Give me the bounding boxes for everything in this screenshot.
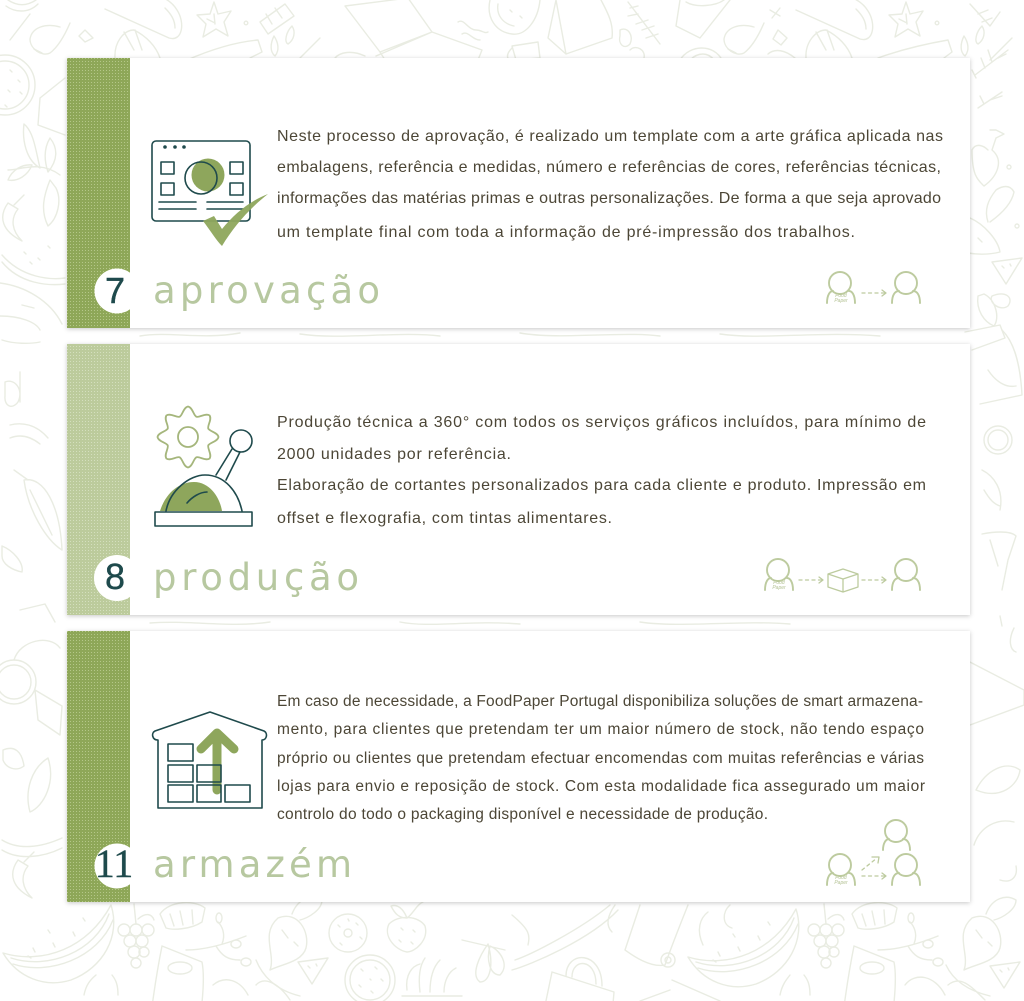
text block: produção: offset e flexografia, com tintas alimentares. [277, 510, 612, 527]
text block: produção: Elaboração de cortantes personalizados para cada cliente e produto. Impressão em [277, 477, 926, 494]
text block: armazém: mento, para clientes que pretendam ter um maior número de stock, não tendo espaço [277, 721, 924, 738]
text block: produção: 2000 unidades por referência. [277, 446, 511, 463]
text block: produção: Produção técnica a 360° com todos os serviços gráficos incluídos, para mínimo de [277, 414, 926, 431]
heading: aprovação: aprovação [153, 269, 380, 312]
side band [67, 58, 130, 328]
top row doodles [6, 0, 1012, 60]
side band [67, 631, 130, 902]
text block: aprovação: Neste processo de aprovação, é realizado um template com a arte gráfica aplicada nas [277, 128, 943, 145]
bottom row doodles [3, 897, 1020, 1001]
icon: flow FoodPaper to box to client [765, 559, 920, 592]
side band [67, 344, 130, 615]
panel: armazém [67, 631, 970, 902]
text block: aprovação: um template final com toda a informação de pré-impressão dos trabalhos. [277, 224, 855, 241]
text block: aprovação [277, 128, 943, 241]
text block: aprovação: informações das matérias primas e outras personalizações. De forma a que seja aprovado [277, 190, 941, 207]
text block: aprovação: embalagens, referência e medidas, número e referências de cores, referências técnicas, [277, 159, 941, 176]
text block: armazém: lojas para envio e reposição de stock. Com esta modalidade fica assegurado um maior [277, 778, 925, 795]
icon: warehouse with stock boxes [153, 712, 266, 808]
text block: produção [277, 414, 926, 527]
heading: produção: produção [153, 556, 359, 599]
right side doodles [965, 50, 1024, 881]
icon: flow FoodPaper to two clients: Food [835, 875, 847, 881]
text block: armazém: próprio ou clientes que pretendam efectuar encomendas com muitas referências e várias [277, 750, 924, 767]
icon: flow FoodPaper to two clients: Paper [834, 880, 848, 886]
text block: armazém: controlo do todo o packaging disponível e necessidade de produção. [277, 806, 768, 823]
icon: flow FoodPaper to box to client: Food [773, 580, 785, 586]
text block: armazém [277, 693, 925, 823]
left side doodles [0, 55, 65, 898]
panel: produção [67, 344, 970, 615]
number badge 11: 11 [95, 841, 133, 886]
icon: flow FoodPaper to box to client: Paper [772, 585, 786, 591]
icon: flow FoodPaper to two clients [827, 820, 920, 886]
icon: flow FoodPaper to client: Paper [834, 298, 848, 304]
panel: aprovação [67, 58, 970, 328]
icon: flow FoodPaper to client [827, 272, 920, 304]
icon: flow FoodPaper to client: Food [835, 293, 847, 299]
number badge 8: 8 [105, 556, 125, 597]
gap strips between panels [140, 333, 880, 624]
icon: gear and lever [155, 406, 252, 526]
number badge 7 [94, 268, 140, 314]
text block: armazém: Em caso de necessidade, a FoodPaper Portugal disponibiliza soluções de smart armazena- [277, 693, 923, 710]
number badge 7: 7 [105, 270, 125, 311]
heading: armazém: armazém [153, 843, 352, 886]
icon: template window with check [152, 141, 268, 246]
number badge 8 [94, 555, 140, 601]
